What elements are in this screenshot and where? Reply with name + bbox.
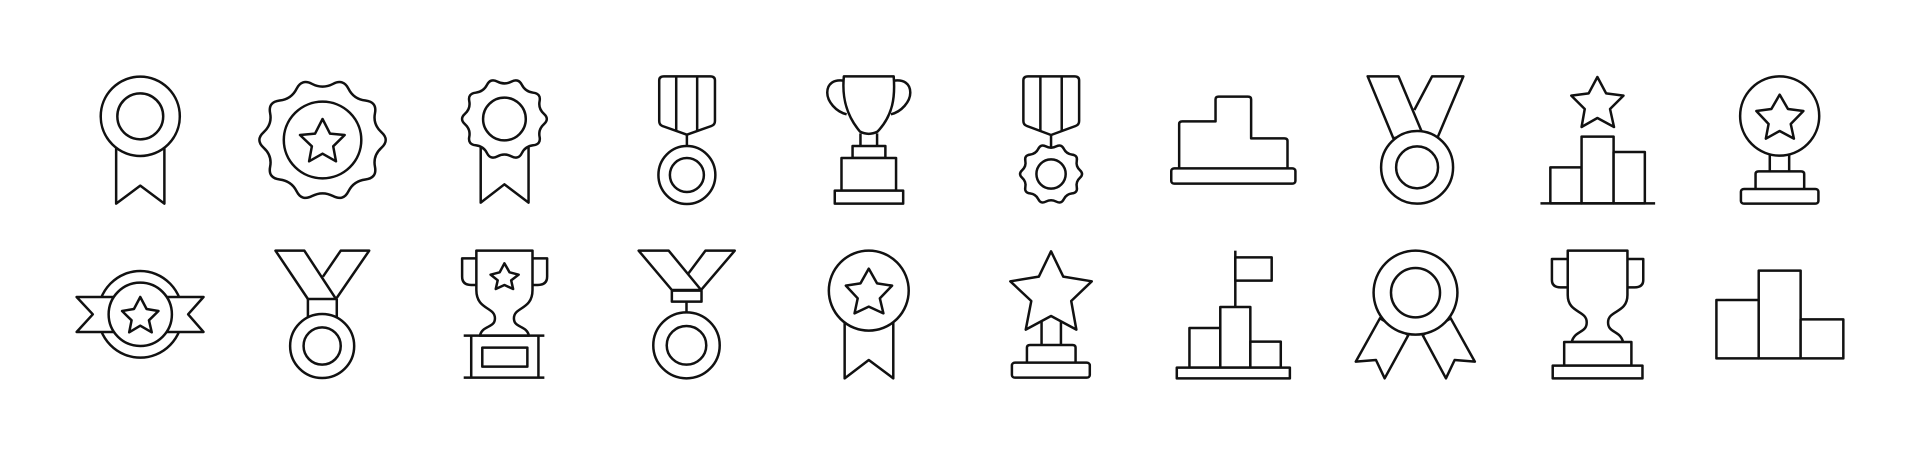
icon: scalloped star badge — [259, 82, 386, 198]
icon: striped ribbon medal — [658, 76, 715, 204]
icon: ribbon rosette — [101, 77, 180, 204]
icon: trophy cup on stepped base — [827, 76, 910, 204]
icon: stepped podium on platform — [1171, 97, 1295, 184]
icon: rosette with two ribbon tails — [1356, 251, 1475, 378]
icon: star rosette with ribbon — [829, 251, 909, 378]
icon: striped ribbon with scalloped medal — [1020, 76, 1082, 202]
icon: V-ribbon medal — [1368, 76, 1463, 204]
icon: star trophy with plaque — [462, 251, 547, 378]
icon: star medallion trophy — [1740, 76, 1819, 204]
icon: star badge with banner — [77, 271, 204, 358]
icon: star over bar podium — [1540, 77, 1655, 203]
icon: three-step podium — [1716, 271, 1843, 358]
icon: star trophy — [1010, 251, 1092, 378]
icon: Y-ribbon medal — [275, 251, 369, 378]
icon: flag on podium — [1177, 251, 1290, 378]
icon: wide ribbon medal with clasp — [639, 251, 735, 378]
icon: scalloped rosette with ribbon — [462, 80, 547, 203]
icon: trophy cup — [1552, 251, 1643, 378]
